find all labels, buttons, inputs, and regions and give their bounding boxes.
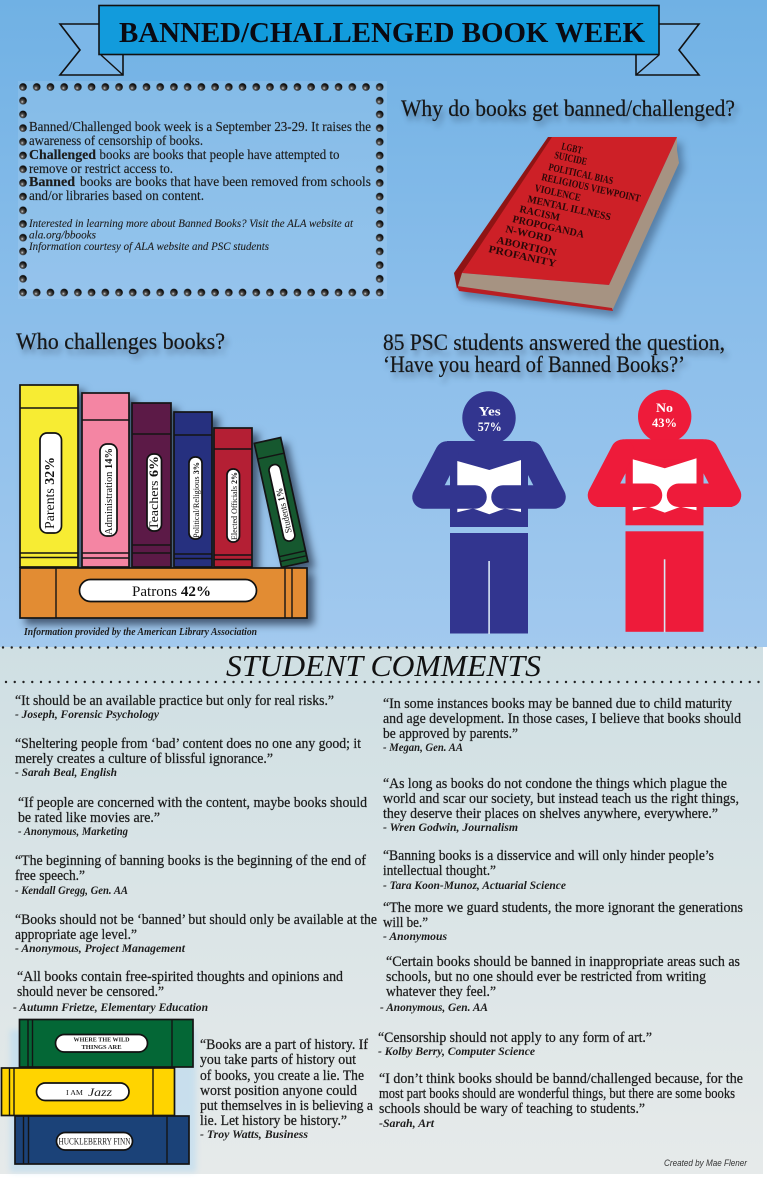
comment: Troy Watts: lie. Let history be history.” [200,1113,347,1129]
comment: Sarah Beal [15,736,361,779]
caption: chart source: Information provided by the American Library Association [23,627,257,638]
book: Huckleberry Finn [15,1116,189,1164]
comment: Anonymous, Project Management [15,912,377,955]
comment: Sarah Beal: “Sheltering people from ‘bad’ content does no one any good; it [15,736,361,752]
label: 57%: 57% [478,419,502,434]
comment: Joseph: - Joseph, Forensic Psychology [15,707,160,721]
definition text: Interested in learning more about Banned Books? Visit the ALA website at [28,216,354,230]
book: patrons 42% [20,568,307,618]
comment: Troy Watts: of books, you create a lie. The [200,1068,364,1084]
label: 43%: 43% [652,415,677,430]
panel: definition box with dotted border [18,81,387,299]
list of reasons: MENTAL ILLNESS [526,194,612,223]
comment: Tara Koon-Munoz [383,848,714,892]
credit: Created by Mae Flener [664,1158,748,1168]
comment: Autumn Frietze: - Autumn Frietze, Elementary Education [13,1000,208,1014]
heading: PSC survey question: ‘Have you heard of Banned Books?’ [383,352,685,377]
comment: Anonymous, Project Management: appropriate age level.” [15,927,137,943]
book: students 1% [254,438,308,567]
definition text: Banned/Challenged book week is a September 23-29. It raises the [29,119,371,134]
heading: who challenges books: Who challenges books? [16,329,225,354]
comment: Joseph: “It should be an available practice but only for real risks.” [15,693,334,709]
heading: student comments with dotted rules: STUDENT COMMENTS [226,648,541,683]
comment: Anonymous, Project Management: - Anonymous, Project Management [15,941,186,955]
icon: red book with reasons [454,137,679,311]
comment: Kolby Berry: “Censorship should not apply to any form of art.” [378,1030,652,1046]
heading: PSC survey question [383,330,725,377]
book shape [454,137,679,311]
book: administration 14%: Administration 14% [104,448,115,535]
label: no: No [656,400,673,415]
definition text: and/or libraries based on content. [29,188,204,203]
comment: Megan: and age development. In those cases, I believe that books should [383,711,742,727]
book: teachers 6%: Teachers 6% [146,456,161,530]
comment: Anonymous [383,900,743,943]
comment: Autumn Frietze [13,969,344,1014]
list of reasons: N-WORD [504,224,553,245]
comment: Wren Godwin: they deserve their places on shelves anywhere, everywhere.” [383,806,718,822]
definition text: Information courtesy of ALA website and PSC students [28,239,269,253]
background: upper blue area [0,0,767,647]
comment: Sarah, Art: -Sarah, Art [379,1116,435,1130]
title text: BANNED/CHALLENGED BOOK WEEK [119,17,645,49]
comment: Anonymous, Gen. AA: schools, but no one should ever be restricted from writing [386,969,706,985]
comment: Sarah, Art: “I don’t think books should be bannd/challenged because, for the [379,1071,743,1087]
list of reasons: PROFANITY [487,244,558,270]
book: political/religious 3% [174,412,212,567]
chart: bookshelf of who challenges books [20,385,308,618]
comment: Troy Watts [200,1037,374,1141]
list of reasons [487,141,641,270]
comment: Tara Koon-Munoz: - Tara Koon-Munoz, Actuarial Science [383,878,567,892]
comment: Kendall Gregg [15,853,366,897]
comment: Tara Koon-Munoz: intellectual thought.” [383,863,496,879]
comment: Troy Watts: - Troy Watts, Business [200,1127,308,1141]
heading: PSC survey question: 85 PSC students answered the question, [383,330,725,355]
comment: Anonymous, Marketing: be rated like movies are.” [18,810,160,826]
book: elected officials 2% [214,428,252,567]
list of reasons: POLITICAL BIAS [547,162,614,187]
book: parents 32% [20,385,78,567]
dotted border left [18,94,29,286]
ribbon body [99,6,659,54]
comment: Wren Godwin: world and scar our society, but instead teach us the right things, [383,791,739,807]
comment: Troy Watts: put themselves in is believing a [200,1098,374,1114]
comment: Kolby Berry [378,1030,652,1058]
comment: Wren Godwin: “As long as books do not condone the things which plague the [383,776,727,792]
definition text: Challenged [29,147,96,162]
comment: Sarah Beal: - Sarah Beal, English [15,765,117,779]
definition text: remove or restrict access to. [29,161,173,176]
background: student comments area [0,647,763,1174]
definition text: ala.org/bbooks [29,228,96,242]
comment: Sarah, Art: schools should be wary of teaching to students.” [379,1101,645,1117]
comment: Anonymous: will be.” [383,915,428,931]
title banner [60,6,699,75]
definition text: books are books that people have attempted to [100,147,340,162]
list of reasons: VIOLENCE [533,183,582,204]
definition text: awareness of censorship of books. [29,133,203,148]
comment: Sarah Beal: merely creates a culture of blissful ignorance.” [15,751,273,767]
comment: Sarah, Art [379,1071,743,1130]
comment: Wren Godwin [383,776,739,834]
book: I Am Jazz: I AM [66,1089,84,1097]
dotted border right [372,94,386,286]
book: teachers 6% [132,403,171,567]
comment: Megan: - Megan, Gen. AA [383,740,463,754]
book: political/religious 3%: Political/Religious 3% [191,462,201,538]
book: administration 14% [82,393,129,567]
comment: Troy Watts: “Books are a part of history. If [200,1037,368,1053]
comment: Autumn Frietze: should never be censored.” [17,984,164,1000]
comment: Troy Watts: worst position anyone could [200,1083,358,1099]
label: yes: Yes [479,404,501,418]
list of reasons: RELIGIOUS VIEWPOINT [540,172,641,205]
comment: Autumn Frietze: “All books contain free-spirited thoughts and opinions and [17,969,344,985]
comment: Wren Godwin: - Wren Godwin, Journalism [383,820,518,834]
figure: yes 57% reader [424,391,554,634]
list of reasons: PROPOGANDA [511,214,585,241]
book: elected officials 2%: Elected Officials 2% [230,472,239,540]
book: students 1%: Students 1% [275,487,295,534]
comment: Kolby Berry: - Kolby Berry, Computer Science [378,1044,536,1058]
icon: stack of three books [2,1020,196,1172]
dotted border top [18,81,387,94]
comments: right column [378,696,743,1130]
comment: Joseph [15,693,334,721]
ribbon tail right [636,24,699,75]
book: I Am Jazz: Jazz [88,1085,112,1099]
comment: Kendall Gregg: free speech.” [15,868,85,884]
comment: Anonymous, Gen. AA [380,954,740,1014]
comment: Megan [383,696,742,754]
comment: Anonymous, Gen. AA: whatever they feel.” [386,984,496,1000]
comment: Troy Watts: you take parts of history out [200,1052,356,1068]
book: Where the Wild Things Are: WHERE THE WILD [74,1036,130,1044]
comment: Kendall Gregg: “The beginning of banning books is the beginning of the end of [15,853,366,869]
comment: Anonymous: - Anonymous [383,929,447,943]
list of reasons: LGBT [560,141,583,157]
comment: Anonymous: “The more we guard students, the more ignorant the generations [383,900,743,916]
list of reasons: SUICIDE [553,150,588,168]
comment: Anonymous, Marketing: - Anonymous, Marketing [18,824,128,838]
comment: Anonymous, Marketing [18,795,368,838]
comment: Anonymous, Gen. AA: - Anonymous, Gen. AA [380,1000,488,1014]
comment: Anonymous, Marketing: “If people are concerned with the content, maybe books should [18,795,368,811]
figure: no 43% reader [600,390,730,632]
list of reasons: ABORTION [495,235,558,259]
book: Where the Wild Things Are [20,1020,193,1067]
definition text [28,119,371,253]
book: parents 32%: Parents 32% [43,457,58,529]
definition text: books are books that have been removed from schools [80,174,371,189]
comment: Anonymous, Gen. AA: “Certain books should be banned in inappropriate areas such as [386,954,740,970]
dotted border bottom [18,286,387,299]
comment: Kendall Gregg: - Kendall Gregg, Gen. AA [15,883,128,897]
comments: left column [13,693,377,1014]
book: Where the Wild Things Are: THINGS ARE [82,1044,122,1051]
comment: Tara Koon-Munoz: “Banning books is a disservice and will only hinder people’s [383,848,714,864]
book: I Am Jazz [2,1068,174,1116]
comment: Megan: “In some instances books may be banned due to child maturity [383,696,733,712]
definition text: Banned [29,174,75,189]
book: Huckleberry Finn: HUCKLEBERRY FINN [58,1136,131,1146]
book: patrons 42%: Patrons 42% [132,584,211,600]
list of reasons: RACISM [518,204,561,224]
comment: Megan: be approved by parents.” [383,726,518,742]
comment: Anonymous, Project Management: “Books should not be ‘banned’ but should only be available at the [15,912,377,928]
heading: why books get banned: Why do books get banned/challenged? [401,96,735,121]
ribbon tail left [60,24,123,75]
